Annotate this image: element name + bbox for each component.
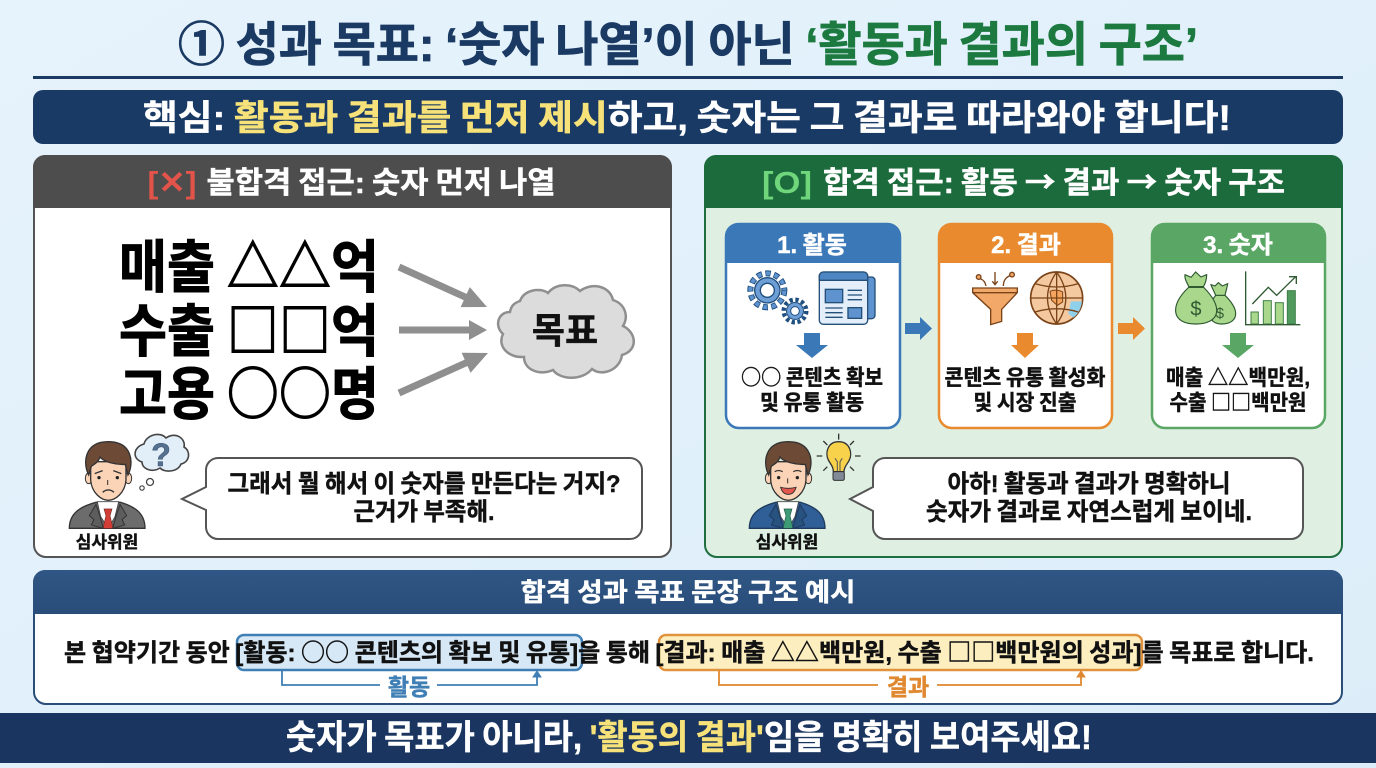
- step 2: result: 2. 결과: [991, 232, 1061, 259]
- speech bubble: doubt: 근거가 부족해.: [354, 498, 494, 526]
- number list: 매출 △△억: [119, 222, 379, 304]
- cloud: goal: 목표: [532, 310, 598, 351]
- connector: result: 결과: [887, 674, 929, 700]
- step 1: activity: 및 유통 활동: [760, 391, 864, 415]
- step 1: activity: [725, 223, 901, 428]
- step 3: numbers: 3. 숫자: [1203, 232, 1273, 259]
- icon: growth chart: [1246, 271, 1300, 325]
- key message banner: 핵심: 활동과 결과를 먼저 제시 하고, 숫자는 그 결과로 따라와야 합니다!: [143, 99, 1231, 138]
- panel header: example sentence: 합격 성과 목표 문장 구조 예시: [520, 579, 856, 607]
- speech bubble: understood: 숫자가 결과로 자연스럽게 보이네.: [926, 498, 1252, 526]
- panel: failing approach: [33, 155, 672, 557]
- icon: money bags: [1176, 272, 1236, 324]
- number list: 수출 □□억: [119, 286, 379, 368]
- connector: activity: [282, 671, 541, 700]
- step 1: activity: 1. 활동: [777, 232, 847, 259]
- icon: globe: [1031, 272, 1083, 324]
- step 1: activity: ○○ 콘텐츠 확보: [741, 361, 883, 392]
- highlight: result: [659, 635, 1142, 670]
- judge: worried: [69, 442, 145, 552]
- panel: example sentence: [33, 570, 1343, 704]
- panel header: passing approach: 합격 접근: 활동 → 결과 → 숫자 구조: [823, 158, 1285, 202]
- thought bubble: [135, 434, 189, 490]
- highlight: activity: [237, 635, 582, 670]
- connector: result: [719, 671, 1085, 700]
- thought bubble: ?: [151, 437, 171, 473]
- arrow: down: [1011, 333, 1039, 358]
- icon: money bags: $: [1190, 298, 1202, 320]
- key message banner: [33, 90, 1343, 144]
- step 3: numbers: 매출 △△백만원,: [1166, 361, 1310, 392]
- number list: 고용 ○○명: [119, 349, 379, 431]
- arrows to goal: [398, 264, 488, 396]
- connector: activity: 활동: [388, 674, 430, 700]
- panel header: failing approach: [✕]: [148, 165, 196, 200]
- icon: gears: [750, 273, 806, 322]
- icon: money bags: $: [1216, 306, 1224, 322]
- icon: funnel: [973, 272, 1017, 325]
- arrow: step 2 to 3: [1118, 317, 1145, 340]
- panel: passing approach: [704, 155, 1343, 557]
- speech bubble: doubt: 그래서 뭘 해서 이 숫자를 만든다는 거지?: [228, 470, 620, 498]
- step 3: numbers: [1151, 223, 1326, 428]
- title: ① 성과 목표: ‘숫자 나열’이 아닌 ‘활동과 결과의 구조’: [178, 18, 1198, 71]
- number list: [119, 222, 379, 431]
- speech bubble: understood: [850, 458, 1303, 539]
- speech bubble: understood: 아하! 활동과 결과가 명확하니: [948, 470, 1230, 498]
- arrow: step 1 to 2: [905, 317, 932, 340]
- icon: light bulb: [817, 434, 861, 480]
- icon: document: [819, 272, 875, 324]
- bottom banner: [0, 713, 1376, 763]
- panel header: passing approach: [704, 155, 1343, 208]
- bottom banner: 숫자가 목표가 아니라, '활동의 결과'임을 명확히 보여주세요!: [286, 719, 1092, 757]
- panel header: failing approach: 불합격 접근: 숫자 먼저 나열: [206, 167, 556, 200]
- panel header: passing approach: [O]: [762, 165, 812, 200]
- step 2: result: 및 시장 진출: [974, 391, 1076, 415]
- judge label: 심사위원: [756, 533, 818, 552]
- speech bubble: doubt: [182, 458, 642, 539]
- arrow: down: [796, 333, 828, 358]
- panel header: example sentence: [33, 570, 1343, 614]
- step 3: numbers: 수출 □□백만원: [1170, 386, 1306, 417]
- judge: pleased: [749, 442, 825, 552]
- arrow: down: [1222, 333, 1254, 358]
- step 2: result: 콘텐츠 유통 활성화: [944, 366, 1106, 390]
- example sentence text: 본 협약기간 동안 [활동: ○○ 콘텐츠의 확보 및 유통]을 통해 [결과: 매출 △△백만원, 수출 □□백만원의 성과]를 목표로 합니다.: [64, 634, 1314, 669]
- step 2: result: [938, 223, 1113, 428]
- cloud: goal: [498, 285, 634, 378]
- panel header: failing approach: [33, 155, 672, 208]
- judge label: 심사위원: [76, 533, 138, 552]
